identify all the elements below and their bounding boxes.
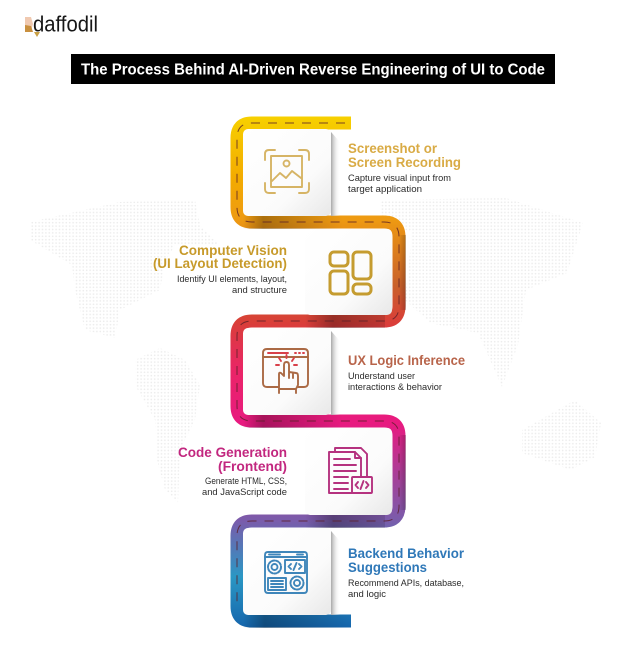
step 4: code generation [178,428,392,515]
step 1: screenshot or screen recording [243,129,461,216]
description: understand user interactions: interactions & behavior [348,382,442,393]
icon: browser with tapping hand [263,349,308,393]
heading: computer vision: (UI Layout Detection) [153,256,287,271]
description: generate html css javascript: and JavaScript code [202,487,287,498]
step 5: backend behavior suggestions [243,528,465,615]
heading: code generation [178,445,287,474]
description: capture visual input: target application [348,184,422,195]
description: capture visual input [348,173,451,195]
step 2: computer vision [153,229,392,315]
description: generate html css javascript [202,476,287,498]
heading: computer vision [153,243,287,271]
description: identify ui elements: Identify UI elements, layout, [177,274,287,285]
icon: documents with code tag [329,448,372,493]
description: identify ui elements [177,274,287,296]
winding ribbon path [237,123,406,628]
description: identify ui elements: and structure [232,285,287,296]
logo: daffodil [33,12,98,36]
icon: layout grid [330,252,371,294]
description: understand user interactions: Understand user [348,371,415,382]
heading: backend behavior suggestions: Backend Behavior [348,546,465,561]
background: dotted world map [30,198,601,503]
step 3: ux logic inference [243,328,465,415]
description: recommend apis database: and logic [348,589,386,600]
heading: screenshot or screen recording: Screenshot or [348,141,438,156]
description: understand user interactions [348,371,442,393]
description: generate html css javascript: Generate HTML, CSS, [205,476,287,487]
heading: code generation: Code Generation [178,445,287,460]
heading: backend behavior suggestions [348,546,465,575]
heading: code generation: (Frontend) [218,459,287,474]
icon: code window with gears [265,552,307,593]
title banner [71,54,555,84]
heading: backend behavior suggestions: Suggestions [348,560,427,575]
heading: screenshot or screen recording [348,141,461,170]
title banner: The Process Behind AI-Driven Reverse Engineering of UI to Code [81,62,545,78]
description: recommend apis database: Recommend APIs, database, [348,578,464,589]
heading: ux logic inference: UX Logic Inference [348,353,465,368]
heading: screenshot or screen recording: Screen Recording [348,155,461,170]
heading: computer vision: Computer Vision [179,243,287,258]
description: recommend apis database [348,578,464,600]
description: capture visual input: Capture visual input from [348,173,451,184]
icon: image in capture frame [265,150,309,193]
